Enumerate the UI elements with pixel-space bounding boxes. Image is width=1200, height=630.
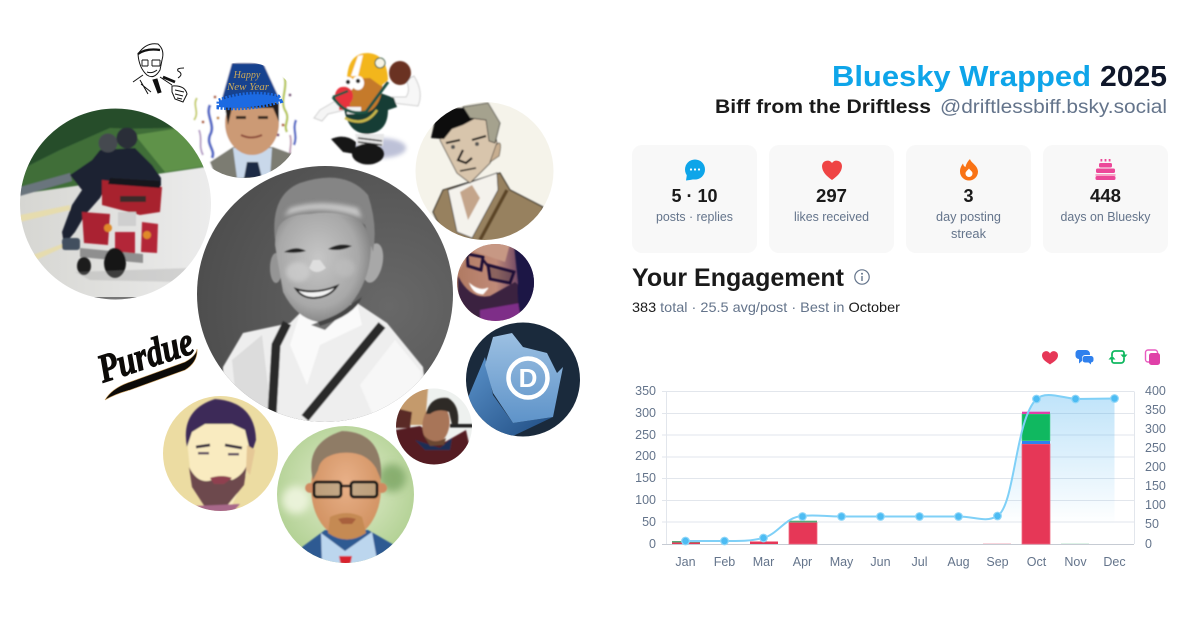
month labels: Jul bbox=[912, 555, 927, 569]
left axis labels: 0 bbox=[649, 537, 656, 551]
subtitle: display name and handle: Biff from the Driftless bbox=[715, 97, 931, 118]
right axis labels: 50 bbox=[1145, 517, 1159, 531]
month labels: Oct bbox=[1027, 555, 1047, 569]
panel: day posting streak: streak bbox=[951, 227, 987, 241]
right axis labels bbox=[1145, 384, 1166, 551]
avatar: potato head football player bbox=[314, 53, 420, 164]
icon: reposts arrows bbox=[1108, 351, 1128, 363]
icon: cake bbox=[1096, 159, 1116, 180]
panel: posts and replies: 5 · 10 bbox=[672, 186, 718, 206]
month labels: Apr bbox=[793, 555, 812, 569]
avatar: main profile photo of smiling boy bbox=[197, 166, 453, 427]
right axis labels: 250 bbox=[1145, 441, 1166, 455]
icon: speech bubble bbox=[685, 160, 705, 180]
icon: info bbox=[855, 270, 869, 284]
left axis labels bbox=[635, 384, 656, 551]
left axis labels: 200 bbox=[635, 449, 656, 463]
gridlines bbox=[662, 392, 1134, 544]
month labels: Dec bbox=[1103, 555, 1126, 569]
avatar: man seated at meeting bbox=[395, 388, 474, 466]
right axis labels: 300 bbox=[1145, 422, 1166, 436]
chart legend icons bbox=[1042, 350, 1160, 365]
avatar: man in party hat bbox=[192, 62, 298, 178]
right axis labels: 150 bbox=[1145, 479, 1166, 493]
panel: day posting streak: 3 bbox=[963, 186, 974, 206]
avatar: Purdue script logo bbox=[91, 318, 199, 400]
icon: flame bbox=[960, 159, 978, 180]
avatar: Wisconsin Democrats logo: D bbox=[519, 363, 537, 393]
panel: days on Bluesky bbox=[1043, 145, 1168, 253]
month labels: Mar bbox=[753, 555, 774, 569]
left axis labels: 300 bbox=[635, 406, 656, 420]
month labels: Aug bbox=[947, 555, 970, 569]
month labels: Jan bbox=[675, 555, 696, 569]
stacked bars bbox=[672, 412, 1089, 544]
cumulative area bbox=[686, 395, 1114, 544]
subtitle: display name and handle bbox=[715, 97, 1167, 118]
avatar: line-drawn man with pipe bbox=[133, 44, 187, 102]
right axis labels: 100 bbox=[1145, 498, 1166, 512]
right axis labels: 350 bbox=[1145, 403, 1166, 417]
heading: Your Engagement: Your Engagement bbox=[632, 264, 845, 292]
right axis labels: 200 bbox=[1145, 460, 1166, 474]
month labels: Sep bbox=[986, 555, 1009, 569]
panel: likes received bbox=[769, 145, 894, 253]
left axis labels: 100 bbox=[635, 493, 656, 507]
avatar: smiling man with glasses in purple light bbox=[457, 244, 535, 322]
month labels: Jun bbox=[870, 555, 891, 569]
icon: quotes squares bbox=[1146, 350, 1160, 365]
avatar: Wisconsin Democrats logo bbox=[466, 322, 580, 438]
panel: likes received: likes received bbox=[794, 210, 869, 224]
icon: heart bbox=[822, 161, 842, 180]
panel: posts and replies: posts · replies bbox=[656, 210, 733, 224]
left axis labels: 350 bbox=[635, 384, 656, 398]
panel: posts and replies bbox=[632, 145, 757, 253]
cumulative line with markers bbox=[682, 395, 1118, 545]
panel: day posting streak bbox=[906, 145, 1031, 253]
month labels: Nov bbox=[1064, 555, 1087, 569]
title: Bluesky Wrapped bbox=[832, 61, 1091, 93]
chart: monthly engagement bbox=[635, 384, 1166, 569]
month labels: Feb bbox=[714, 555, 735, 569]
panel: days on Bluesky: days on Bluesky bbox=[1060, 210, 1151, 224]
month labels bbox=[675, 555, 1126, 569]
left axis labels: 150 bbox=[635, 471, 656, 485]
avatar: bearded man on yellow background bbox=[162, 395, 280, 515]
panel: likes received: 297 bbox=[816, 186, 847, 206]
icon: replies bubbles bbox=[1076, 350, 1094, 364]
avatar: man in party hat: Happy bbox=[233, 70, 261, 81]
avatar: Purdue script logo: Purdue bbox=[91, 318, 199, 392]
left axis labels: 250 bbox=[635, 428, 656, 442]
subtitle: display name and handle: @driftlessbiff.bsky.social bbox=[940, 97, 1167, 118]
icon: likes heart bbox=[1042, 351, 1058, 364]
panel: days on Bluesky: 448 bbox=[1090, 186, 1121, 206]
avatar: motorcycle riders bbox=[20, 108, 212, 301]
avatar: illustrated man in brown jacket bbox=[415, 100, 555, 242]
right axis labels: 0 bbox=[1145, 537, 1152, 551]
avatar: man with glasses and red tie bbox=[276, 425, 416, 566]
panel: day posting streak: day posting bbox=[936, 210, 1001, 224]
right axis labels: 400 bbox=[1145, 384, 1166, 398]
avatar: man in party hat: New Year bbox=[226, 81, 270, 93]
engagement summary text: 383 total · 25.5 avg/post · Best in October bbox=[632, 299, 900, 315]
title: 2025 bbox=[1100, 61, 1167, 93]
month labels: May bbox=[830, 555, 854, 569]
left axis labels: 50 bbox=[642, 515, 656, 529]
